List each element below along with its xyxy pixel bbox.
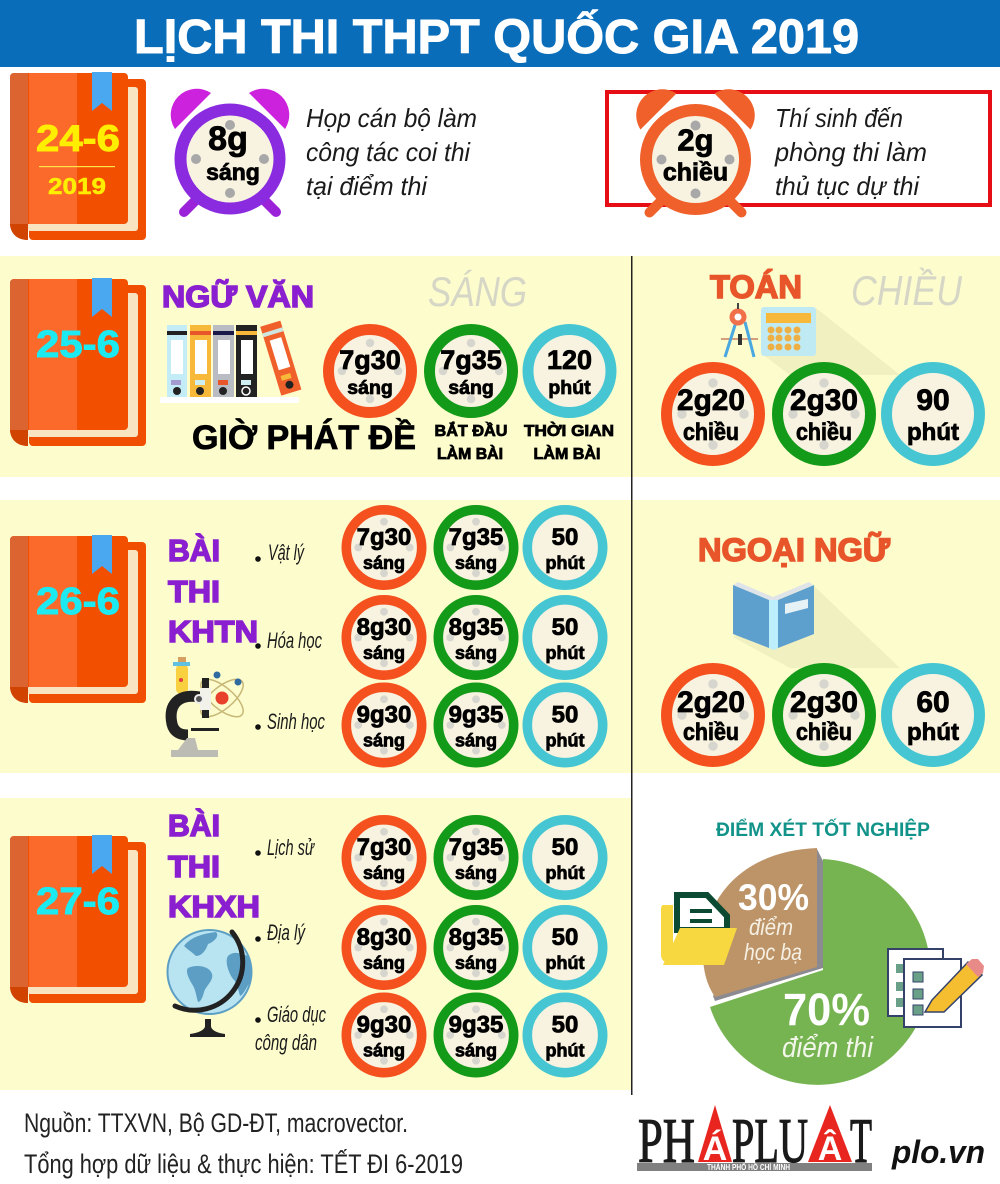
clock: bắt đầu 7g35 sáng: 7g35 <box>440 345 502 375</box>
label: 70%: 70% <box>783 984 870 1035</box>
label: Sáng: SÁNG <box>428 268 527 315</box>
heading: Ngoại ngữ: NGOẠI NGỮ <box>698 532 890 568</box>
logo: Pháp Luật: PH <box>638 1105 695 1176</box>
clock: 2g30 chiều <box>778 368 870 460</box>
clock: 2g30 chiều: chiều <box>796 419 852 446</box>
clock: 90 phút <box>886 368 980 460</box>
clock row: Vật lý: 7g35 <box>449 524 503 551</box>
subjects list: Vật lý <box>268 540 305 565</box>
logo: Pháp Luật: THÀNH PHỐ HỒ CHÍ MINH <box>707 1162 790 1172</box>
heading: bài thi KHXH <box>168 808 260 924</box>
clock row: Lịch sử: 7g30 <box>357 834 411 861</box>
icon: calendar book 25-6 <box>10 278 146 446</box>
source credits: Nguồn: TTXVN, Bộ GD-ĐT, macrovector. <box>24 1108 408 1138</box>
clock row: Địa lý: sáng <box>363 953 405 973</box>
panel: graduation score <box>661 819 984 1085</box>
clock: 120 phút: phút <box>548 377 591 399</box>
text: họp cán bộ <box>306 103 477 201</box>
heading: bài thi KHTN: BÀI <box>168 533 220 568</box>
clock row: Vật lý: phút <box>546 553 584 573</box>
clock: 120 phút <box>528 330 611 412</box>
text: họp cán bộ: tại điểm thi <box>306 171 428 201</box>
text: thí sinh đến <box>774 103 927 201</box>
heading: bài thi KHXH: THI <box>168 849 220 884</box>
logo: Pháp Luật: T <box>850 1105 872 1176</box>
icon: calendar book 27-6: 27-6 <box>36 881 120 923</box>
label: điểm học bạ <box>744 914 802 965</box>
text: họp cán bộ: công tác coi thi <box>306 137 471 167</box>
clock: 90 phút: 90 <box>916 384 950 417</box>
clock: 2g20 chiều: chiều <box>683 419 739 446</box>
icon: orange alarm clock 2g chiều: 2g <box>677 122 714 158</box>
icon: globe <box>168 930 252 1037</box>
heading: bài thi KHTN: KHTN <box>168 614 258 649</box>
label: giờ phát đề: GIỜ PHÁT ĐỀ <box>192 419 416 457</box>
logo: Pháp Luật <box>637 1105 872 1176</box>
clock row: Vật lý: 50 <box>552 524 578 551</box>
text: thí sinh đến: thủ tục dự thi <box>775 171 920 201</box>
panel: 24-6 <box>10 72 990 240</box>
panel backgrounds <box>0 256 1000 1095</box>
callout: red box <box>607 92 990 205</box>
clock row: Sinh học: 9g30 <box>357 702 411 728</box>
logo: Pháp Luật: PLU <box>732 1105 808 1176</box>
clock row: Hóa học: sáng <box>455 643 497 663</box>
clock: bắt đầu 7g35 sáng <box>430 330 512 412</box>
clock row: Giáo dục công dân <box>346 997 603 1073</box>
clock row: Hóa học: phút <box>546 643 584 663</box>
text: thí sinh đến: phòng thi làm <box>774 137 927 167</box>
clock row: Vật lý: sáng <box>363 553 405 573</box>
clock row: Giáo dục công dân: sáng <box>363 1040 405 1060</box>
clock row: Lịch sử: phút <box>546 863 584 883</box>
clock row: Lịch sử: sáng <box>455 863 497 883</box>
heading: bài thi KHTN: THI <box>168 574 220 609</box>
panel: 26-6 foreign language <box>666 532 980 762</box>
clock row: Sinh học: sáng <box>455 730 497 750</box>
icon: calendar book 26-6: 26-6 <box>36 581 120 623</box>
subjects list: Hóa học <box>267 628 322 653</box>
clock row: Giáo dục công dân: 9g35 <box>449 1012 503 1038</box>
clock row: Địa lý: phút <box>546 953 584 973</box>
panel: 26-6 KHTN <box>10 510 603 763</box>
clock: 2g30 chiều: chiều <box>796 719 852 746</box>
heading: bài thi KHXH: KHXH <box>168 889 260 924</box>
panel: 27-6 KHXH <box>10 808 603 1073</box>
label: điểm thi: điểm thi <box>782 1032 874 1064</box>
icon: binders <box>160 321 301 403</box>
clock: 60 phút: 60 <box>916 686 950 719</box>
clock: 2g20 chiều <box>666 668 760 762</box>
heading: Ngữ văn: NGỮ VĂN <box>162 278 314 314</box>
clock row: Giáo dục công dân: 9g30 <box>357 1012 411 1038</box>
clock row: Lịch sử: 7g35 <box>449 834 503 861</box>
label: bắt đầu làm bài <box>434 421 508 463</box>
icon: calendar book 25-6: 25-6 <box>36 324 120 366</box>
label: 30%: 30% <box>738 877 809 918</box>
clock: 120 phút: 120 <box>547 345 592 375</box>
subjects list <box>255 540 325 734</box>
clock row: Địa lý: 50 <box>552 924 578 951</box>
clock: 60 phút <box>886 668 980 762</box>
clock row: Sinh học: 9g35 <box>449 702 503 728</box>
clock row: Giáo dục công dân: 50 <box>552 1012 578 1038</box>
title: LỊCH THI THPT QUỐC GIA 2019 <box>134 9 859 64</box>
subjects list: Giáo dục <box>267 1002 326 1027</box>
icon: calendar book 24-6: 24-6 <box>36 118 120 159</box>
heading: bài thi KHXH: BÀI <box>168 808 220 843</box>
icon: purple alarm clock 8g sáng: 8g <box>208 120 248 158</box>
heading: điểm xét tốt nghiệp: ĐIỂM XÉT TỐT NGHIỆP <box>716 819 930 841</box>
clock row: Giáo dục công dân: sáng <box>455 1040 497 1060</box>
subjects list: Lịch sử <box>267 835 315 860</box>
clock row: Hóa học: 50 <box>552 614 578 641</box>
logo: plo.vn: plo.vn <box>891 1134 985 1170</box>
clock: 2g30 chiều: 2g30 <box>790 686 858 719</box>
subjects list: Địa lý <box>267 920 306 945</box>
clock row: Lịch sử <box>346 820 603 895</box>
subjects list <box>255 835 326 1055</box>
icon: orange alarm clock 2g chiều <box>636 89 755 212</box>
clock: 2g20 chiều: 2g20 <box>677 686 745 719</box>
panel: 25-6 morning <box>10 268 614 463</box>
heading: Toán: TOÁN <box>710 269 802 305</box>
logo: Pháp Luật: Á <box>703 1130 727 1168</box>
label: thời gian làm bài: THỜI GIAN <box>524 421 614 440</box>
clock row: Hóa học: 8g35 <box>449 614 503 641</box>
icon: purple alarm clock 8g sáng: sáng <box>206 159 260 185</box>
icon: purple alarm clock 8g sáng <box>171 89 289 212</box>
icon: calendar book 27-6 <box>10 835 146 1003</box>
label: điểm học bạ: điểm <box>749 914 793 940</box>
clock: 2g20 chiều <box>666 368 760 460</box>
logo: Pháp Luật: Ậ <box>818 1130 842 1168</box>
label: thời gian làm bài: LÀM BÀI <box>534 444 600 463</box>
clock row: Địa lý: sáng <box>455 953 497 973</box>
panel: 25-6 afternoon <box>666 267 980 460</box>
clock row: Vật lý <box>346 510 603 585</box>
clock row: Vật lý: 7g30 <box>357 524 411 551</box>
clock row: Lịch sử: sáng <box>363 863 405 883</box>
clock row: Vật lý: sáng <box>455 553 497 573</box>
icon: calendar book 24-6: 2019 <box>48 173 106 199</box>
clock: phát đề 7g30 sáng: 7g30 <box>339 345 401 375</box>
clock: 2g30 chiều <box>778 668 870 762</box>
icon: compass and calculator <box>721 303 900 375</box>
source credits: Tổng hợp dữ liệu & thực hiện: TẾT ĐI 6-2019 <box>24 1148 463 1179</box>
icon: orange alarm clock 2g chiều: chiều <box>663 158 728 186</box>
subjects list: công dân <box>255 1030 317 1055</box>
clock row: Sinh học: phút <box>546 730 584 750</box>
label: Chiều: CHIỀU <box>851 267 963 314</box>
clock row: Địa lý <box>346 910 603 985</box>
clock row: Hóa học: 8g30 <box>357 614 411 641</box>
text: thí sinh đến: Thí sinh đến <box>775 103 903 133</box>
label: bắt đầu làm bài: BẮT ĐẦU <box>434 421 508 440</box>
clock: 90 phút: phút <box>907 419 959 446</box>
icon: open book <box>733 582 900 668</box>
icon: calendar book 24-6 <box>10 72 146 240</box>
clock row: Sinh học <box>346 687 603 763</box>
clock: bắt đầu 7g35 sáng: sáng <box>448 377 494 399</box>
icon: microscope and atom <box>171 657 249 757</box>
clock: 2g20 chiều: chiều <box>683 719 739 746</box>
header banner <box>0 0 1000 67</box>
label: bắt đầu làm bài: LÀM BÀI <box>437 444 503 463</box>
subjects list: Sinh học <box>267 709 325 734</box>
heading: bài thi KHTN <box>168 533 258 649</box>
source credits <box>24 1108 463 1179</box>
clock row: Địa lý: 8g30 <box>357 924 411 951</box>
clock: phát đề 7g30 sáng: sáng <box>347 377 393 399</box>
icon: folder with document <box>661 895 737 965</box>
clock row: Hóa học: sáng <box>363 643 405 663</box>
clock row: Địa lý: 8g35 <box>449 924 503 951</box>
clock row: Giáo dục công dân: phút <box>546 1040 584 1060</box>
icon: calendar book 26-6 <box>10 535 146 703</box>
label: điểm học bạ: học bạ <box>744 939 802 965</box>
clock row: Sinh học: 50 <box>552 702 578 728</box>
clock: 60 phút: phút <box>907 719 959 746</box>
clock row: Hóa học <box>346 600 603 675</box>
clock: 2g30 chiều: 2g30 <box>790 384 858 417</box>
text: họp cán bộ: Họp cán bộ làm <box>306 103 477 133</box>
clock row: Sinh học: sáng <box>363 730 405 750</box>
label: thời gian làm bài <box>524 421 614 463</box>
clock: 2g20 chiều: 2g20 <box>677 384 745 417</box>
pie chart <box>703 848 930 1085</box>
icon: checklist and pencil <box>888 949 984 1027</box>
clock row: Lịch sử: 50 <box>552 834 578 861</box>
clock: phát đề 7g30 sáng <box>328 330 412 412</box>
